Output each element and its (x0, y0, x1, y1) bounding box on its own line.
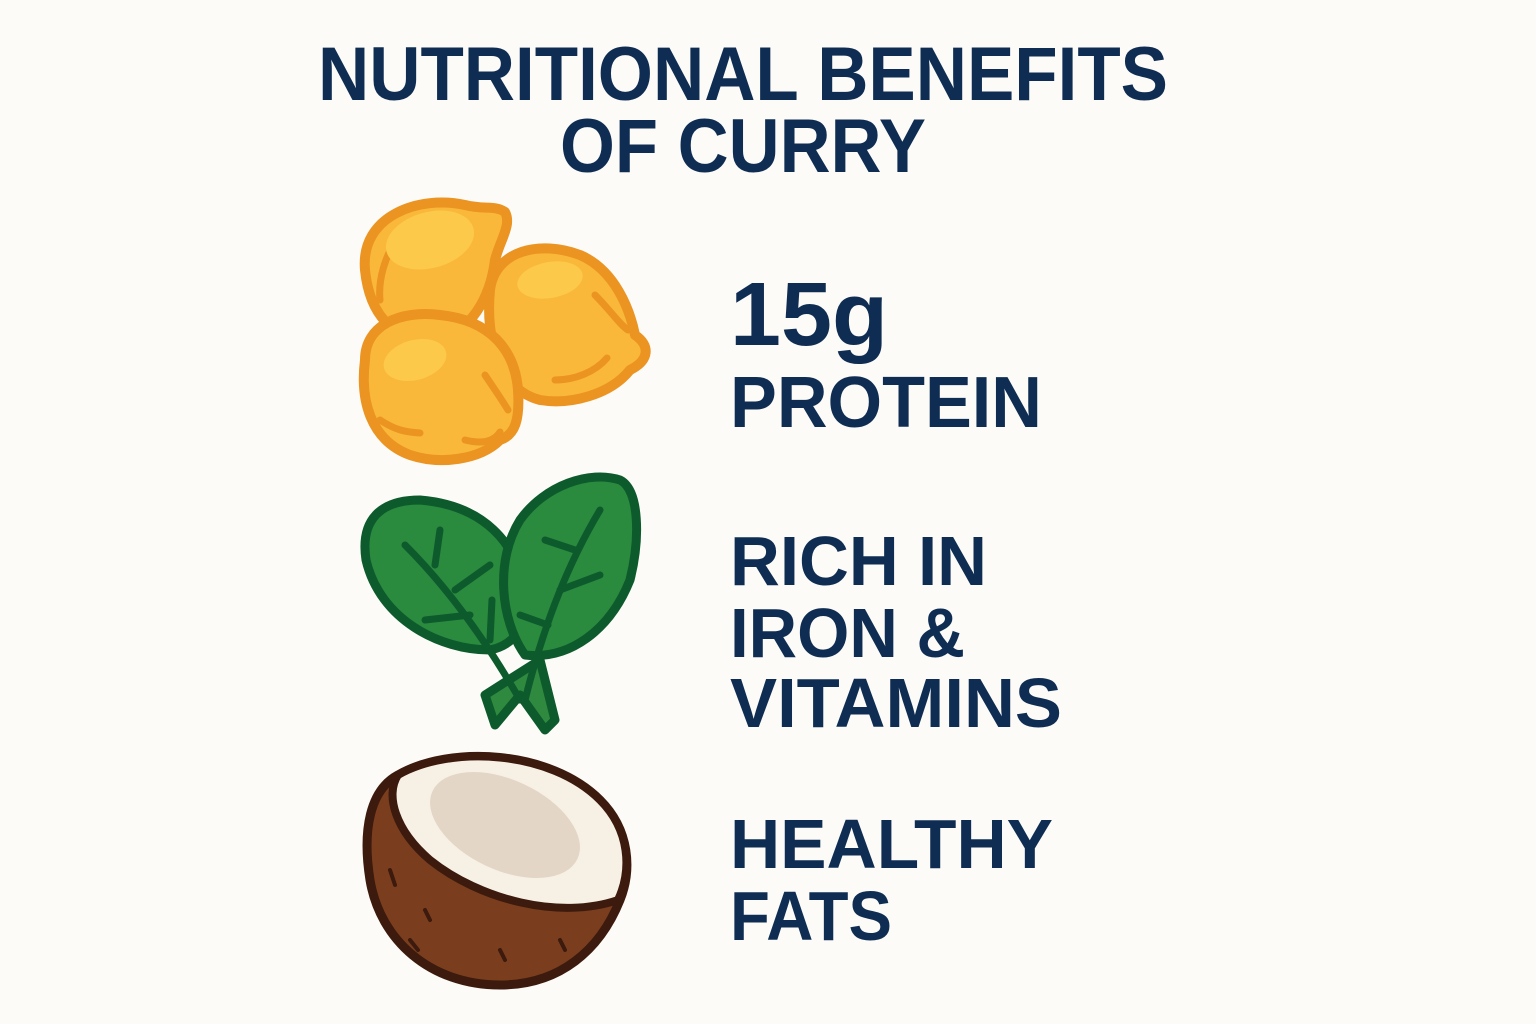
title (318, 32, 1168, 189)
title: NUTRITIONAL BENEFITS (318, 32, 1168, 117)
text: protein (730, 265, 1042, 443)
text: healthy fats: FATS (730, 877, 892, 955)
text: iron & vitamins: VITAMINS (730, 664, 1062, 742)
title: OF CURRY (560, 104, 926, 189)
icon: coconut (367, 750, 627, 985)
icon: chickpeas (364, 201, 646, 460)
text: iron & vitamins: IRON & (730, 594, 965, 672)
text: healthy fats: HEALTHY (730, 805, 1053, 883)
text: iron & vitamins: RICH IN (730, 522, 987, 600)
text: protein: PROTEIN (730, 363, 1042, 443)
text: protein: 15g (730, 265, 888, 365)
icon: spinach (365, 477, 637, 730)
text: iron & vitamins (730, 522, 1062, 742)
text: healthy fats (730, 805, 1053, 955)
